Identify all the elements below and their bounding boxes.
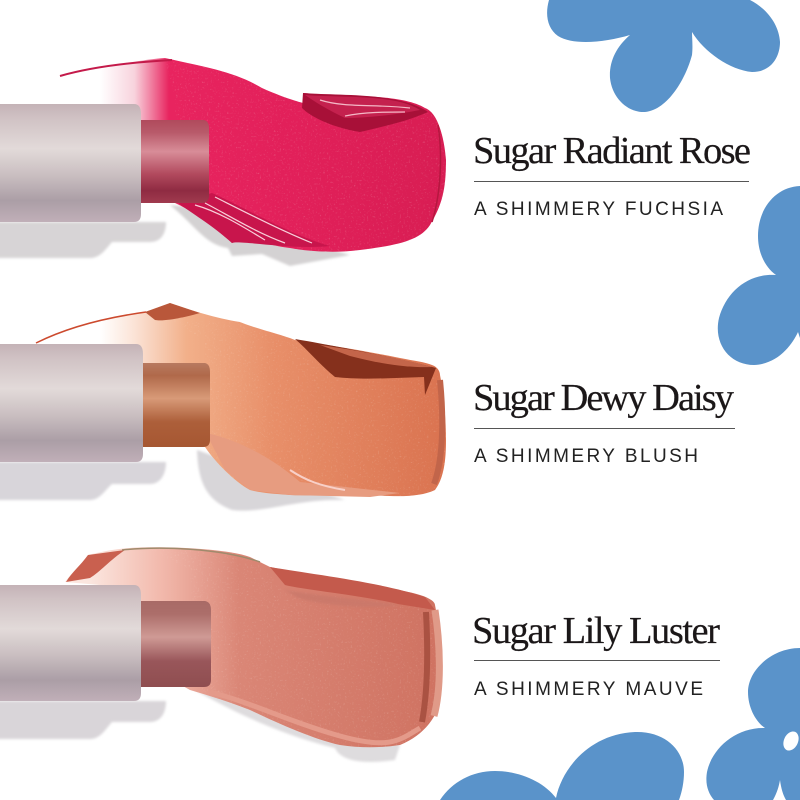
blush wisp line — [36, 312, 146, 343]
title: Sugar Radiant Rose: Sugar Radiant Rose — [473, 130, 751, 172]
tube barrel — [0, 585, 141, 701]
swatch: blush lipstick smear — [36, 300, 450, 511]
lipstick: blush tube — [0, 344, 210, 500]
tube bullet — [143, 363, 210, 447]
subtitle: A shimmery fuchsia: A SHIMMERY FUCHSIA — [474, 199, 723, 220]
tube cast shadow — [0, 462, 166, 500]
mauve lower ridge — [210, 692, 420, 743]
fuchsia folded ridge — [302, 93, 428, 132]
shadow under fuchsia smear — [170, 205, 350, 266]
divider — [474, 181, 749, 182]
icon: blue flower bottom right — [706, 648, 800, 800]
tube cast shadow — [0, 222, 166, 258]
smear body fuchsia — [100, 58, 446, 252]
fuchsia lower ridge — [178, 193, 330, 247]
lipstick: fuchsia tube — [0, 104, 209, 258]
mauve right rim — [422, 610, 439, 722]
tube bullet — [141, 120, 209, 203]
blush right rim — [434, 380, 442, 484]
icon: blue flower bottom centre — [440, 732, 684, 800]
tube barrel — [0, 104, 141, 222]
subtitle: A shimmery mauve: A SHIMMERY MAUVE — [474, 679, 703, 700]
swatch: fuchsia lipstick smear — [60, 55, 450, 266]
subtitle: A shimmery blush: A SHIMMERY BLUSH — [474, 446, 698, 467]
smear body blush — [100, 303, 446, 496]
mauve folded ridge — [270, 567, 435, 610]
icon: blue flower top right — [547, 0, 780, 112]
fuchsia top wisp — [60, 60, 172, 76]
title: Sugar Lily Luster: Sugar Lily Luster — [472, 610, 720, 652]
tube barrel — [0, 344, 143, 462]
tube cast shadow — [0, 701, 166, 739]
blush top fold — [145, 303, 436, 395]
divider — [474, 660, 720, 661]
icon: blue flower right edge — [718, 186, 800, 365]
divider — [474, 428, 735, 429]
fuchsia shimmer — [165, 55, 450, 255]
shadow under mauve smear — [195, 690, 400, 762]
mauve top edge — [122, 548, 260, 562]
mauve shimmer — [175, 550, 436, 747]
fuchsia right rim — [432, 125, 440, 222]
blush shimmer — [174, 321, 446, 496]
lipstick: mauve tube — [0, 585, 211, 739]
blush lower ridge — [206, 433, 400, 497]
mauve left curl — [66, 550, 125, 582]
shadow under blush smear — [197, 450, 345, 511]
swatch: mauve lipstick smear — [65, 545, 445, 762]
title: Sugar Dewy Daisy: Sugar Dewy Daisy — [473, 377, 735, 419]
tube bullet — [141, 601, 211, 687]
smear body mauve — [65, 547, 442, 747]
